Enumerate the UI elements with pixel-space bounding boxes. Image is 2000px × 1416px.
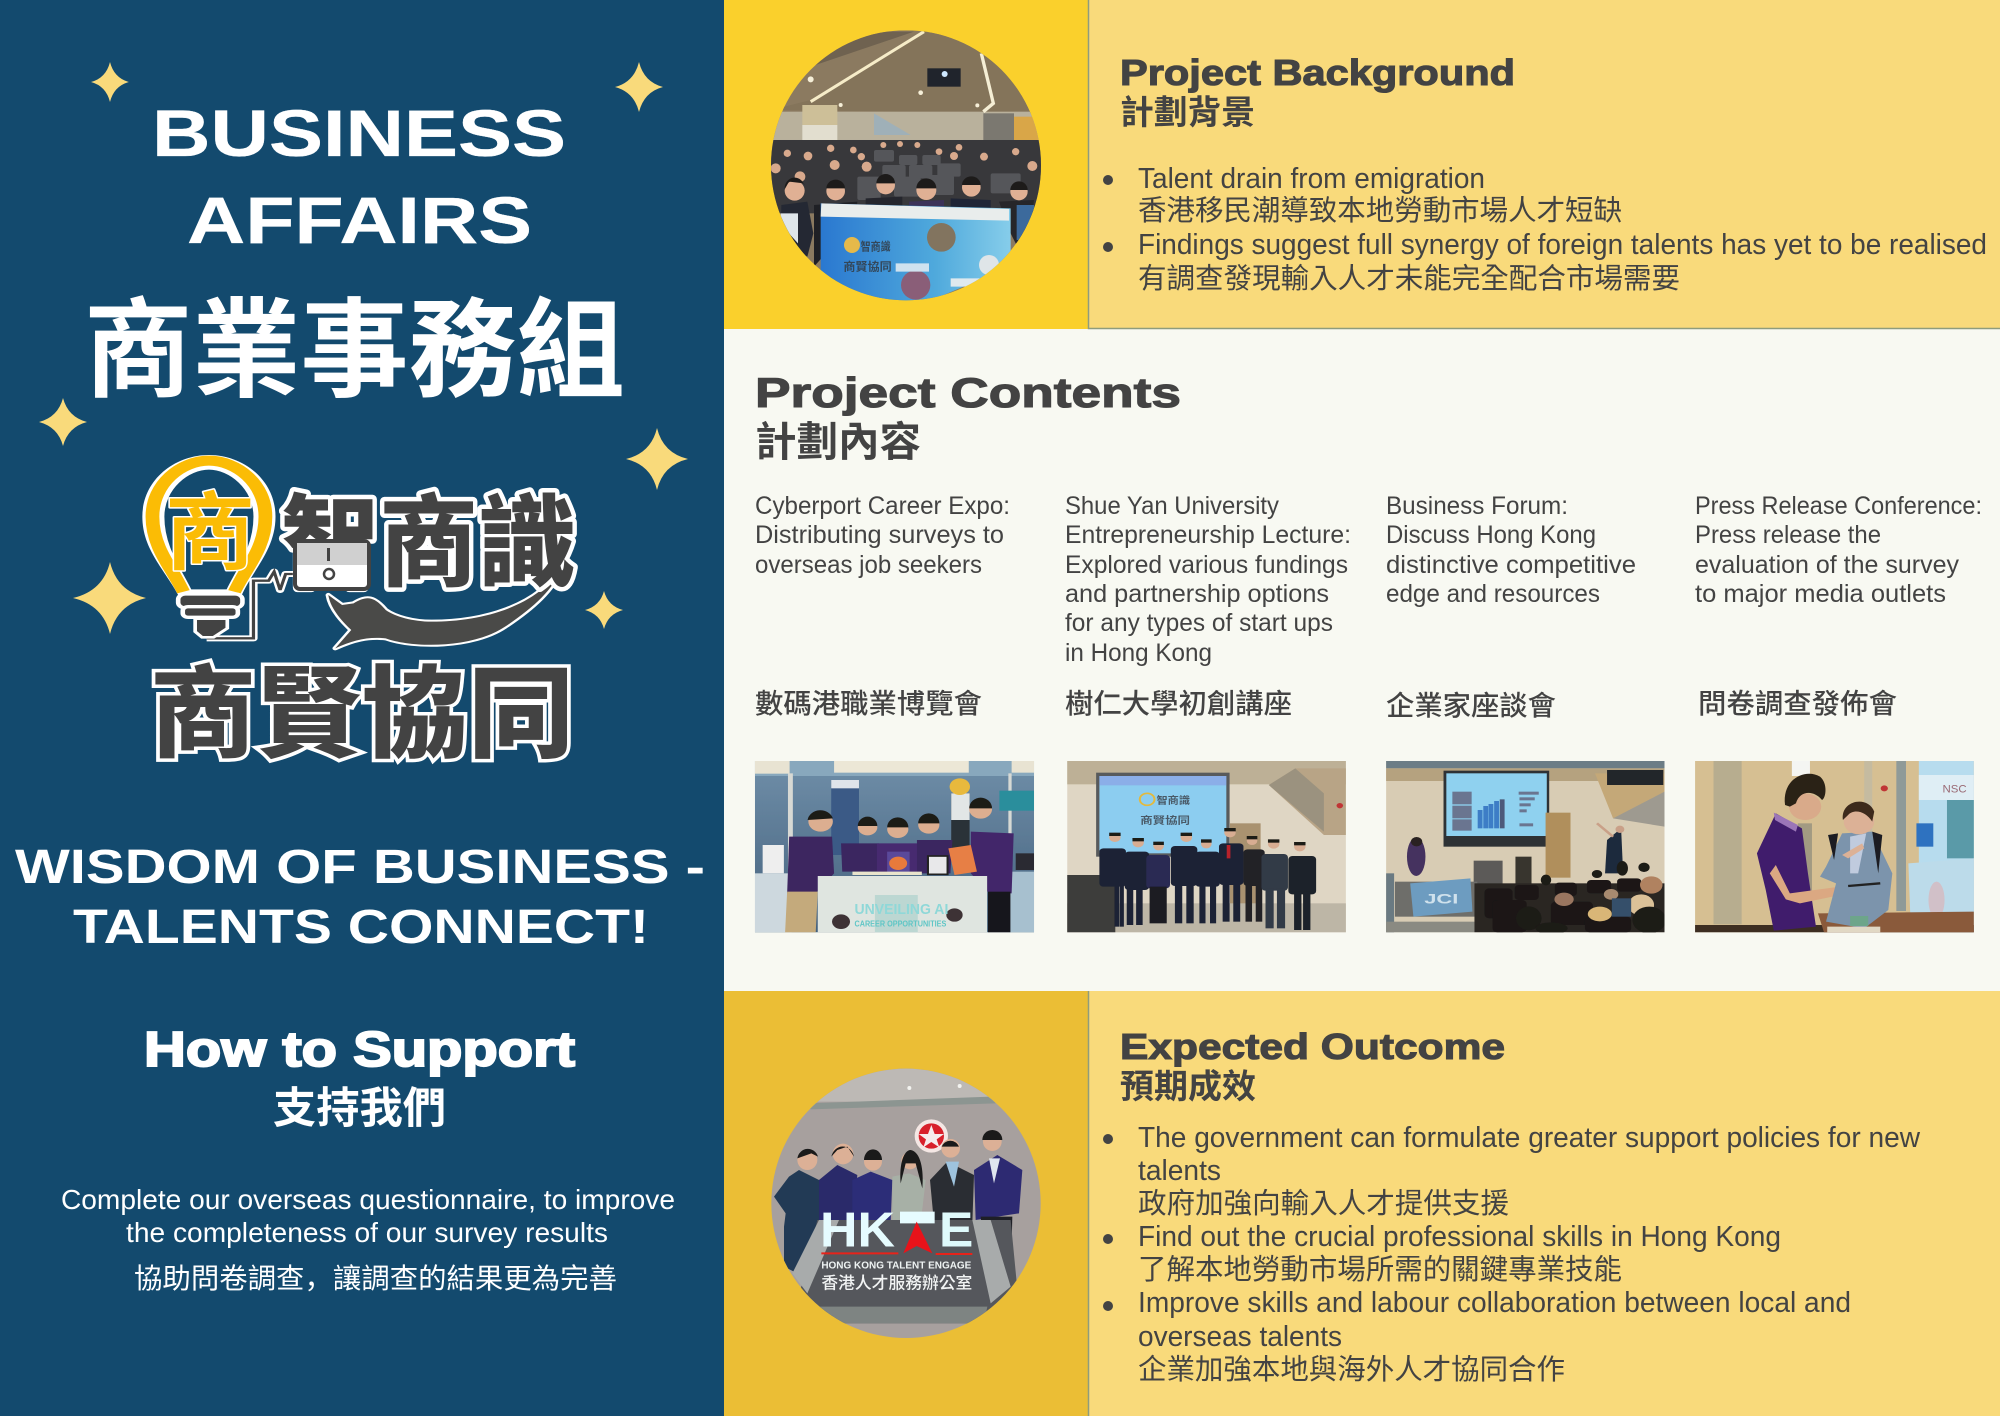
list: expected outcome bullets: 企業加強本地與海外人才協同合作 bbox=[1138, 1354, 1565, 1386]
column: Shue Yan University lecture: for any types of start ups bbox=[1065, 609, 1333, 637]
panel: left navy sidebar bbox=[0, 0, 724, 1416]
list: project background bullets: Findings suggest full synergy of foreign talents has yet to be realised bbox=[1138, 229, 1987, 261]
column: Business Forum bbox=[1386, 492, 1636, 721]
list: expected outcome bullets: overseas talents bbox=[1138, 1321, 1342, 1353]
logo: lightbulb and project name: 商 bbox=[165, 487, 255, 582]
list: expected outcome bullets: 了解本地勞動市場所需的關鍵專業技能 bbox=[1138, 1254, 1622, 1286]
photo: business forum presentation bbox=[1386, 761, 1664, 932]
panel: expected outcome text block bbox=[1088, 991, 2000, 1416]
column: Shue Yan University lecture: and partnership options bbox=[1065, 580, 1329, 608]
column: Cyberport Career Expo: 數碼港職業博覽會 bbox=[755, 688, 982, 719]
column: Shue Yan University lecture: Shue Yan University bbox=[1065, 492, 1279, 520]
heading: Expected Outcome: Expected Outcome bbox=[1120, 1026, 1505, 1067]
column: Shue Yan University lecture: in Hong Kong bbox=[1065, 639, 1212, 667]
subtitle: Wisdom of Business bbox=[15, 841, 705, 954]
column: Press Release Conference: Press Release Conference: bbox=[1695, 492, 1982, 520]
logo: lightbulb and project name: 智商識 bbox=[281, 488, 576, 600]
panel: project contents bbox=[724, 329, 2000, 991]
list: expected outcome bullets: The government can formulate greater support policies for new bbox=[1138, 1122, 1920, 1154]
heading: Expected Outcome: 預期成效 bbox=[1120, 1069, 1256, 1106]
column: Cyberport Career Expo: Distributing surveys to bbox=[755, 521, 1004, 549]
photo: Shue Yan lecture group: 智商識 bbox=[1157, 794, 1190, 807]
photo: audience group with banner: 商賢協同 bbox=[843, 260, 892, 274]
sparkle stars bbox=[39, 62, 688, 634]
column: Press Release Conference bbox=[1695, 492, 1982, 719]
photo: Shue Yan lecture group: 商賢協同 bbox=[1140, 814, 1190, 827]
column: Cyberport Career Expo: Cyberport Career Expo: bbox=[755, 492, 1010, 520]
subtitle: Wisdom of Business: WISDOM OF BUSINESS - bbox=[15, 841, 705, 894]
heading: Project Contents: Project Contents bbox=[755, 369, 1181, 416]
photo: audience group with banner bbox=[771, 30, 1041, 303]
photo: business forum presentation: JCI bbox=[1424, 892, 1458, 907]
heading: Project Background bbox=[1120, 52, 1515, 132]
photo: team at Hong Kong Talent Engage: 香港人才服務辦公室 bbox=[821, 1272, 972, 1292]
title: BUSINESS AFFAIRS: BUSINESS bbox=[152, 96, 566, 170]
panel: project background text block bbox=[1088, 0, 2000, 329]
column: Business Forum: Discuss Hong Kong bbox=[1386, 521, 1596, 549]
column: Business Forum: edge and resources bbox=[1386, 580, 1600, 608]
title: BUSINESS AFFAIRS: AFFAIRS bbox=[187, 183, 532, 257]
heading: How to Support: How to Support bbox=[144, 1023, 575, 1077]
photo: career expo booth bbox=[754, 761, 1034, 932]
text block: how to support description: the completeness of our survey results bbox=[126, 1217, 608, 1248]
text block: how to support description: Complete our overseas questionnaire, to improve bbox=[61, 1184, 675, 1215]
heading: Project Background: Project Background bbox=[1120, 52, 1515, 93]
photo: survey conversation bbox=[1695, 761, 1974, 932]
column: Press Release Conference: to major media outlets bbox=[1695, 580, 1946, 608]
column: Business Forum: distinctive competitive bbox=[1386, 551, 1636, 579]
logo: lightbulb and project name bbox=[142, 455, 576, 771]
column: Business Forum: Business Forum: bbox=[1386, 492, 1568, 520]
list: project background bullets bbox=[1103, 163, 1987, 295]
column: Press Release Conference: Press release the bbox=[1695, 521, 1881, 549]
column: Shue Yan University lecture: Explored various fundings bbox=[1065, 551, 1348, 579]
column: Shue Yan University lecture: 樹仁大學初創講座 bbox=[1065, 688, 1292, 719]
subtitle: Wisdom of Business: TALENTS CONNECT! bbox=[73, 901, 649, 954]
list: expected outcome bullets: Find out the crucial professional skills in Hong Kong bbox=[1138, 1221, 1781, 1253]
photo: survey conversation: NSC bbox=[1943, 783, 1967, 795]
text block: how to support description bbox=[61, 1184, 675, 1297]
title: Chinese team name: 商業事務組 bbox=[84, 290, 625, 411]
list: project background bullets: 有調查發現輸入人才未能完全配合市場需要 bbox=[1138, 263, 1680, 295]
heading: How to Support bbox=[144, 1023, 575, 1133]
list: expected outcome bullets: Improve skills and labour collaboration between local and bbox=[1138, 1287, 1851, 1319]
photo: team at Hong Kong Talent Engage bbox=[771, 1068, 1041, 1339]
column: Shue Yan University lecture bbox=[1065, 492, 1351, 719]
heading: Project Contents: 計劃內容 bbox=[755, 419, 921, 465]
panel: expected outcome photo block bbox=[724, 991, 1089, 1416]
photo: team at Hong Kong Talent Engage: E bbox=[939, 1203, 973, 1258]
list: expected outcome bullets: 政府加強向輸入人才提供支援 bbox=[1138, 1188, 1509, 1220]
photo: career expo booth: CAREER OPPORTUNITIES bbox=[854, 920, 946, 928]
column: Cyberport Career Expo bbox=[755, 492, 1010, 719]
heading: Expected Outcome bbox=[1120, 1026, 1505, 1106]
column: Shue Yan University lecture: Entrepreneurship Lecture: bbox=[1065, 521, 1351, 549]
logo: lightbulb and project name: 商賢協同 bbox=[150, 659, 574, 771]
list: project background bullets: 香港移民潮導致本地勞動市場人才短缺 bbox=[1138, 195, 1622, 227]
column: Cyberport Career Expo: overseas job seekers bbox=[755, 551, 982, 579]
column: Press Release Conference: evaluation of the survey bbox=[1695, 551, 1959, 579]
photo: Shue Yan lecture group bbox=[1067, 761, 1346, 932]
heading: How to Support: 支持我們 bbox=[273, 1085, 446, 1133]
column: Press Release Conference: 問卷調查發佈會 bbox=[1698, 688, 1897, 719]
heading: Project Contents bbox=[755, 369, 1181, 465]
photo: team at Hong Kong Talent Engage: HK bbox=[820, 1203, 895, 1258]
title: BUSINESS AFFAIRS bbox=[152, 96, 566, 257]
list: expected outcome bullets: talents bbox=[1138, 1155, 1221, 1187]
list: project background bullets: Talent drain from emigration bbox=[1138, 163, 1485, 195]
photo: team at Hong Kong Talent Engage: HONG KONG TALENT ENGAGE bbox=[821, 1260, 972, 1271]
photo: audience group with banner: 智商識 bbox=[861, 240, 891, 254]
photo: career expo booth: UNVEILING AI bbox=[854, 901, 948, 918]
column: Business Forum: 企業家座談會 bbox=[1386, 690, 1556, 721]
panel: project background photo block bbox=[724, 0, 1089, 329]
heading: Project Background: 計劃背景 bbox=[1120, 95, 1255, 132]
list: expected outcome bullets bbox=[1103, 1122, 1920, 1386]
text block: how to support description: 協助問卷調查，讓調查的結果更為完善 bbox=[134, 1257, 617, 1297]
